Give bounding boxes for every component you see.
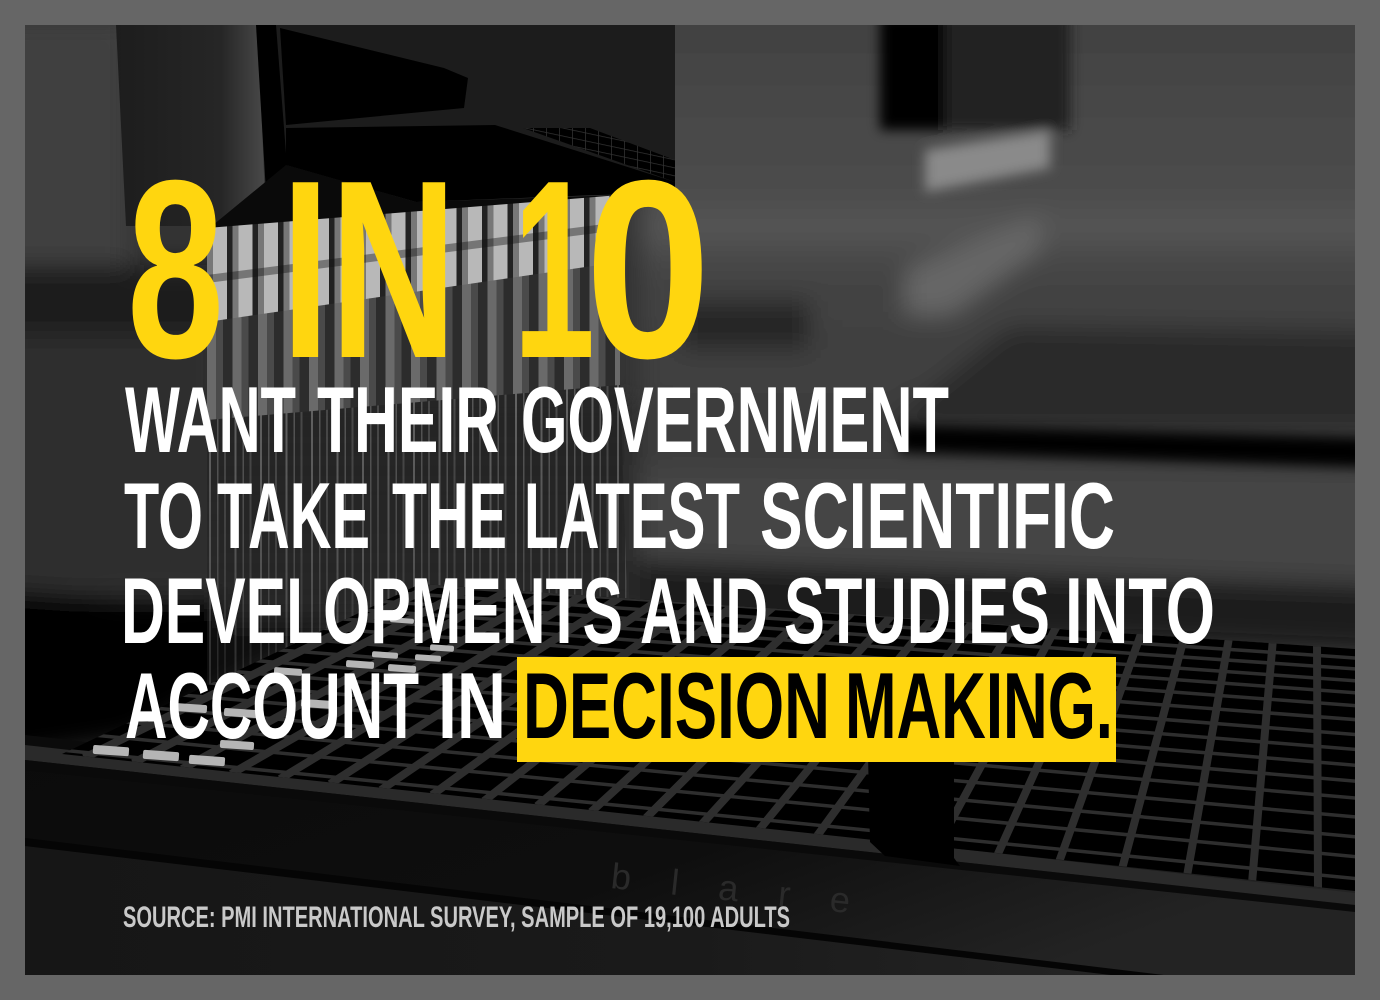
line 2: TAKE [217, 463, 370, 568]
machine body below plate [25, 735, 1355, 1000]
faint machine brand lettering: blare [609, 855, 892, 925]
statement text [121, 367, 1215, 758]
line 2 [124, 463, 1115, 568]
line 3: STUDIES [784, 558, 1050, 663]
line 3: INTO [1065, 558, 1215, 663]
line 1 [125, 367, 949, 472]
pipette tubes [207, 195, 630, 690]
line 2: TO [124, 463, 203, 568]
line 2: THE [392, 463, 507, 568]
line 3: AND [640, 558, 768, 663]
highlighted phrase: decision making: DECISION [523, 653, 830, 758]
line 4: IN [438, 653, 506, 758]
line 4: ACCOUNT [125, 653, 419, 758]
line 1: GOVERNMENT [521, 367, 949, 472]
highlighted phrase: decision making: MAKING. [845, 653, 1113, 758]
blurred background room [0, 0, 1380, 760]
source note: SOURCE: PMI INTERNATIONAL SURVEY, SAMPLE OF 19,100 ADULTS [123, 901, 790, 934]
headline statistic: 8 in 10: 1 [513, 127, 595, 411]
line 1: THEIR [317, 367, 499, 472]
line 3: DEVELOPMENTS [121, 558, 623, 663]
pipette head housing [116, 25, 675, 230]
headline statistic: 8 in 10: 0 [585, 127, 711, 411]
headline statistic: 8 in 10 [127, 127, 711, 411]
headline statistic: 8 in 10: 8 [127, 127, 224, 411]
line 2: LATEST [524, 463, 740, 568]
blurred dark box and light bar [880, 15, 1380, 468]
lit plate cells [93, 617, 454, 766]
headline statistic: 8 in 10: IN [281, 127, 457, 411]
line 1: WANT [125, 367, 296, 472]
line 2: SCIENTIFIC [760, 463, 1115, 568]
black pipette foot [868, 755, 960, 866]
sample plate grid [62, 584, 1355, 891]
